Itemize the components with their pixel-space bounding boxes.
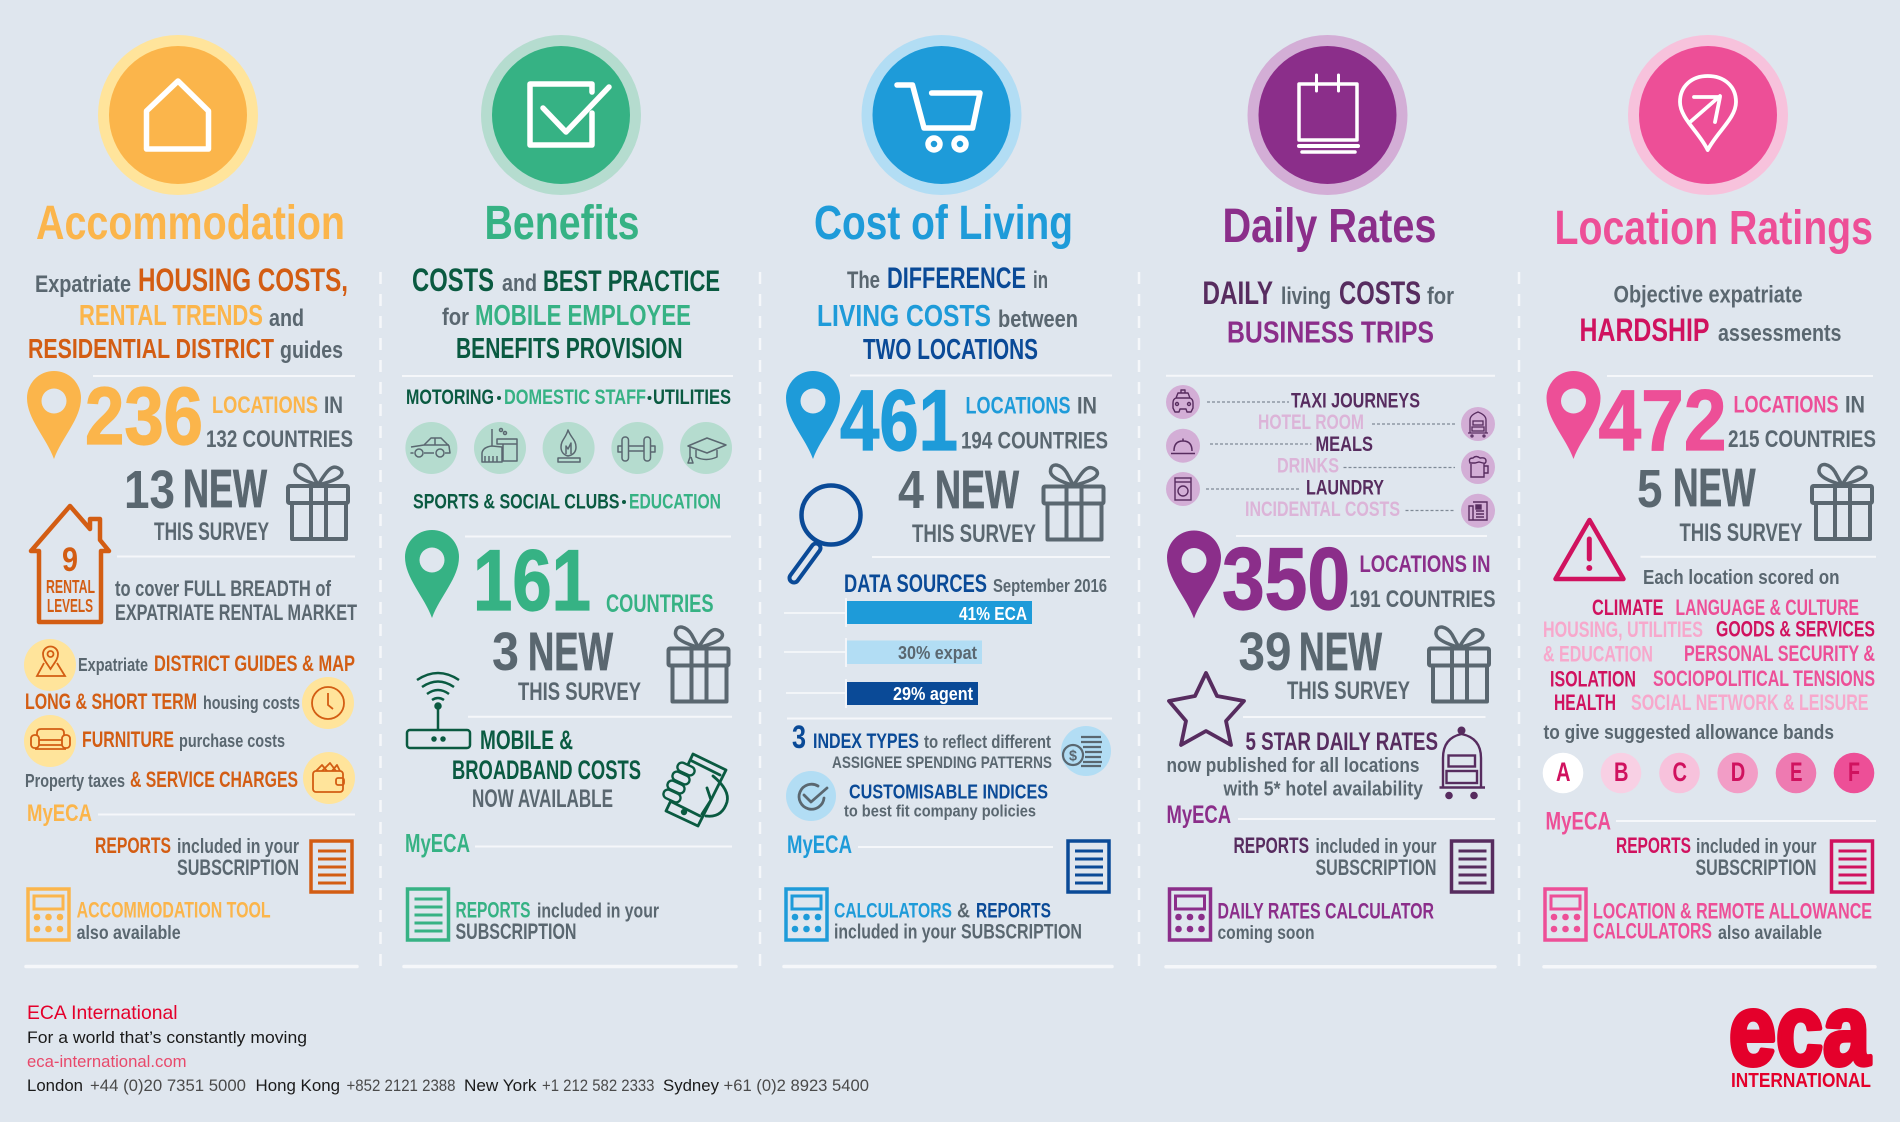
text block: scoring categories: HOUSING, UTILITIES — [1543, 617, 1703, 642]
bar: 41% ECA — [847, 601, 1032, 624]
text block: daily rates description: COSTS — [1339, 275, 1421, 311]
icon: wifi router — [407, 673, 470, 748]
panel: benefits — [402, 35, 736, 966]
icon: 9 rental levels house: LEVELS — [47, 596, 93, 616]
icon: report — [1832, 841, 1872, 892]
icon: district map — [24, 639, 76, 691]
bar: 29% agent — [847, 682, 978, 705]
text: mobile and broadband costs: MOBILE & — [480, 725, 573, 755]
bar chart: data sources — [784, 598, 1032, 708]
text block: cost of living description: in — [1033, 267, 1048, 294]
text block: scoring categories — [1543, 595, 1875, 715]
heading: data sources: DATA SOURCES — [844, 570, 987, 598]
icon: checkbox badge — [481, 35, 641, 195]
icon: gift — [668, 627, 728, 702]
icon: location pin — [1546, 371, 1600, 459]
text block: scoring categories: CLIMATE — [1592, 595, 1664, 620]
stat: 350 locations: 191 COUNTRIES — [1350, 586, 1496, 613]
icon: gift — [1812, 464, 1872, 539]
footer: contact details: For a world that’s constantly moving — [27, 1028, 307, 1047]
stat: 350 locations: LOCATIONS IN — [1360, 551, 1490, 578]
stat: 3 new this survey: NEW — [528, 622, 613, 682]
text block: benefits description: and — [502, 270, 537, 297]
text block: benefits description: BEST PRACTICE — [543, 265, 720, 298]
icon: notepad badge — [1248, 35, 1408, 195]
text: daily rates calculator: DAILY RATES CALCULATOR — [1218, 898, 1434, 924]
icon: customisable check — [786, 771, 836, 821]
text: calculators and reports: SUBSCRIPTION — [961, 920, 1082, 944]
icon: location pin — [786, 371, 840, 459]
chart: allowance bands A to F: A — [1556, 757, 1570, 787]
text: reports: REPORTS — [456, 898, 530, 922]
item: incidental costs: INCIDENTAL COSTS — [1245, 498, 1400, 521]
text: reports: included in your — [1696, 836, 1817, 858]
text block: location ratings description: assessments — [1718, 320, 1842, 347]
icon: dumbbell — [611, 422, 663, 474]
bar: 30% expat — [847, 640, 982, 664]
text: benefit categories top — [406, 386, 731, 409]
stat: 4 new this survey: THIS SURVEY — [912, 520, 1036, 548]
icon: calculator — [28, 889, 69, 940]
text: benefit categories top: MOTORING — [406, 386, 494, 409]
chart: allowance bands A to F: C — [1672, 757, 1687, 787]
stat: 472 locations: IN — [1845, 392, 1865, 418]
icon: location pin — [405, 530, 459, 618]
stat: 39 new this survey — [1238, 622, 1410, 705]
stat: 461 locations: 461 — [840, 373, 958, 469]
stat: 5 new this survey: THIS SURVEY — [1680, 519, 1803, 547]
icon: 9 rental levels house: 9 — [62, 541, 78, 579]
text: accommodation tool: also available — [77, 923, 181, 944]
icon: calculator — [1545, 889, 1586, 940]
item: laundry — [1166, 472, 1384, 506]
text block: accommodation description: guides — [280, 337, 343, 364]
icon: 9 rental levels house — [31, 506, 109, 622]
item: drinks: DRINKS — [1277, 454, 1339, 478]
icon: warning triangle — [1556, 520, 1624, 579]
icon: report — [311, 841, 352, 892]
icon: sofa — [24, 715, 76, 767]
stat: 236 locations: 132 COUNTRIES — [206, 426, 353, 453]
heading: MyECA: MyECA — [1166, 801, 1231, 829]
text: calculators and reports: CALCULATORS — [834, 900, 952, 922]
footer: contact details: +852 2121 2388 — [346, 1076, 456, 1095]
text: location allowance calculators — [1593, 898, 1872, 944]
text: reports — [456, 898, 659, 944]
text: furniture — [82, 727, 285, 752]
text: reports — [1234, 833, 1437, 880]
text: district guides: DISTRICT GUIDES & MAP — [154, 651, 355, 676]
text: 5 star daily rates: 5 STAR DAILY RATES — [1246, 728, 1438, 756]
icon: car — [405, 422, 457, 474]
text: long and short term: LONG & SHORT TERM — [25, 689, 197, 714]
text: furniture: FURNITURE — [82, 727, 174, 752]
text block: benefits description: BENEFITS PROVISION — [456, 333, 682, 365]
text: 5 star daily rates: with 5* hotel availability — [1223, 778, 1424, 800]
icon: house badge — [98, 35, 258, 195]
text: reports — [1616, 833, 1817, 880]
stat: 13 new this survey — [124, 459, 269, 546]
icon: clock — [302, 677, 354, 729]
text block: accommodation description — [28, 262, 348, 364]
stat: 3 new this survey: 3 — [492, 622, 519, 682]
chart: allowance bands A to F: B — [1614, 757, 1628, 787]
stat: 4 new this survey: NEW — [935, 460, 1019, 520]
footer: contact details: Hong Kong — [256, 1076, 340, 1095]
stat: 5 new this survey: 5 — [1637, 459, 1662, 519]
text block: cost of living description: DIFFERENCE — [887, 262, 1026, 295]
logo: ECA International: INTERNATIONAL — [1731, 1070, 1871, 1092]
item: incidental costs — [1245, 494, 1495, 528]
heading: data sources: September 2016 — [993, 576, 1107, 596]
text: benefit categories top: DOMESTIC STAFF — [504, 386, 646, 409]
icon: location pin — [27, 371, 81, 459]
text block: daily rates description: BUSINESS TRIPS — [1227, 314, 1434, 350]
heading: accommodation: Accommodation — [36, 197, 345, 250]
footer: contact details: New York — [464, 1076, 537, 1095]
icon: cleaning — [474, 422, 526, 474]
text: index types: ASSIGNEE SPENDING PATTERNS — [832, 753, 1052, 772]
text: location allowance calculators: also available — [1718, 923, 1822, 944]
footer: contact details: +1 212 582 2333 — [542, 1076, 654, 1095]
heading: MyECA: MyECA — [787, 831, 852, 859]
chart: allowance bands A to F: D — [1731, 757, 1745, 787]
text: index types: INDEX TYPES — [813, 730, 919, 753]
bar: 41% ECA: 41% ECA — [959, 604, 1027, 624]
text: reports: SUBSCRIPTION — [1316, 855, 1436, 880]
panel: location ratings — [1543, 35, 1876, 967]
icon: graduation cap — [680, 422, 732, 474]
heading: daily rates: Daily Rates — [1222, 200, 1436, 253]
text: index types: 3 — [792, 719, 806, 755]
item: hotel room — [1258, 407, 1495, 441]
heading: cost of living: Cost of Living — [814, 197, 1073, 250]
text: benefit categories bottom: SPORTS & SOCIAL CLUBS — [413, 490, 620, 514]
text block: cost of living description — [817, 262, 1078, 366]
stat: 350 locations — [1222, 529, 1496, 628]
icon: location pin — [1167, 530, 1221, 618]
text: mobile and broadband costs: NOW AVAILABLE — [472, 785, 613, 813]
heading: MyECA: MyECA — [405, 828, 470, 858]
text block: scoring categories: & EDUCATION — [1543, 642, 1653, 666]
text block: cost of living description: The — [847, 267, 880, 294]
text block: location ratings description: Objective expatriate — [1614, 282, 1802, 308]
stat: 161 countries — [473, 533, 714, 629]
text: customisable indices — [844, 782, 1048, 820]
stat: 161 countries: 161 — [473, 533, 591, 629]
text: allowance bands intro: to give suggested allowance bands — [1544, 722, 1834, 744]
stat: 472 locations: 472 — [1598, 373, 1726, 469]
text block: accommodation description: and — [269, 305, 304, 332]
text: reports: SUBSCRIPTION — [177, 855, 299, 880]
footer: contact details: ECA International — [27, 1002, 178, 1024]
text block: benefits description: for — [442, 304, 469, 331]
stat: 461 locations: 194 COUNTRIES — [961, 428, 1108, 454]
text block: daily rates description: DAILY — [1202, 275, 1273, 311]
stat: 3 new this survey — [492, 622, 641, 706]
text: 5 star daily rates: now published for all locations — [1166, 755, 1420, 777]
text: reports — [95, 833, 299, 880]
text block: scoring categories: HEALTH — [1554, 690, 1616, 715]
icon: luggage trolley — [1440, 728, 1485, 798]
text: reports: REPORTS — [1234, 833, 1309, 858]
panel: accommodation — [24, 35, 357, 966]
text block: accommodation description: HOUSING COSTS, — [138, 262, 348, 298]
icon: report — [408, 889, 448, 940]
icon: 9 rental levels house: RENTAL — [46, 577, 95, 597]
icon: gas flame — [543, 422, 595, 474]
icon: report — [1068, 841, 1109, 892]
item: meals — [1166, 429, 1373, 463]
icon: calculator — [1170, 889, 1210, 940]
chart: allowance bands A to F — [1543, 753, 1874, 793]
text: calculators and reports: & — [957, 900, 970, 922]
text block: location ratings description — [1580, 282, 1842, 348]
text: reports: included in your — [1316, 836, 1437, 858]
text block: location ratings description: HARDSHIP — [1580, 312, 1710, 348]
icon: gift — [288, 464, 348, 539]
heading: MyECA: MyECA — [27, 800, 92, 827]
text: customisable indices: CUSTOMISABLE INDICES — [849, 782, 1048, 804]
heading: benefits: Benefits — [484, 197, 640, 250]
bar: 30% expat: 30% expat — [898, 643, 977, 663]
stat: 350 locations: 350 — [1222, 529, 1350, 628]
text: reports: REPORTS — [95, 833, 171, 858]
text: accommodation tool: ACCOMMODATION TOOL — [77, 898, 271, 922]
text block: accommodation description: RENTAL TRENDS — [79, 300, 263, 332]
text: customisable indices: to best fit company policies — [844, 802, 1036, 820]
text: district guides: Expatriate — [78, 655, 148, 675]
icon: gift — [1429, 627, 1489, 702]
icon: calculator — [786, 889, 827, 940]
stat: 5 new this survey: NEW — [1673, 458, 1756, 518]
icon: gift — [1044, 465, 1104, 540]
stat: 461 locations: IN — [1077, 392, 1097, 420]
text block: full breadth: EXPATRIATE RENTAL MARKET — [115, 600, 357, 625]
stat: 161 countries: COUNTRIES — [606, 590, 714, 618]
text: 5 star daily rates — [1166, 728, 1438, 800]
text: reports: SUBSCRIPTION — [456, 919, 576, 944]
text: calculators and reports: included in your — [834, 922, 956, 944]
footer: contact details: +61 (0)2 8923 5400 — [724, 1076, 869, 1095]
chart: allowance bands A to F: E — [1790, 757, 1802, 787]
text block: scoring categories: ISOLATION — [1550, 666, 1636, 692]
text: service charges: Property taxes — [25, 771, 125, 791]
text: scoring intro: Each location scored on — [1643, 567, 1840, 589]
text: reports: included in your — [537, 900, 659, 922]
stat: 13 new this survey: NEW — [183, 459, 267, 519]
icon: star — [1169, 673, 1244, 745]
footer: contact details: eca-international.com — [27, 1052, 186, 1071]
stat: 236 locations: 236 — [85, 371, 203, 462]
text block: benefits description: MOBILE EMPLOYEE — [475, 300, 691, 332]
stat: 13 new this survey: THIS SURVEY — [154, 518, 269, 546]
text: location allowance calculators: CALCULATORS — [1593, 918, 1712, 944]
text: daily rates calculator — [1218, 898, 1434, 944]
text: reports: REPORTS — [1616, 833, 1691, 858]
text block: benefits description: COSTS — [412, 262, 494, 298]
text block: benefits description — [412, 262, 720, 365]
text: long and short term: housing costs — [203, 693, 300, 713]
stat: 472 locations — [1598, 373, 1876, 469]
text: calculators and reports: REPORTS — [976, 900, 1051, 922]
text: index types — [792, 719, 1052, 772]
logo: ECA International: eca — [1729, 974, 1871, 1086]
text block: accommodation description: Expatriate — [35, 271, 131, 298]
stat: 4 new this survey: 4 — [898, 460, 924, 520]
text: index types: to reflect different — [924, 732, 1051, 752]
text: calculators and reports — [834, 900, 1082, 944]
icon: coins: $ — [1069, 748, 1078, 764]
stat: 13 new this survey: 13 — [124, 460, 175, 520]
text: benefit categories top: UTILITIES — [653, 386, 731, 409]
heading: MyECA: MyECA — [1546, 808, 1611, 836]
footer: contact details: London — [27, 1076, 83, 1095]
icon: location arrow badge — [1628, 35, 1788, 195]
item: meals: MEALS — [1316, 433, 1373, 456]
stat: 461 locations — [840, 373, 1108, 469]
icon: coins — [1061, 726, 1111, 776]
icon: report — [1452, 841, 1492, 892]
stat: 5 new this survey — [1637, 458, 1803, 547]
text block: daily rates description: living — [1281, 283, 1331, 310]
stat: 461 locations: LOCATIONS — [966, 392, 1070, 420]
text block: cost of living description: TWO LOCATIONS — [863, 334, 1038, 366]
footer: contact details: +44 (0)20 7351 5000 — [90, 1076, 246, 1095]
stat: 236 locations: IN — [324, 392, 343, 419]
text block: full breadth — [115, 576, 357, 625]
text block: full breadth: to cover FULL BREADTH of — [115, 576, 332, 601]
text: mobile and broadband costs: BROADBAND COSTS — [452, 755, 641, 785]
chart: allowance bands A to F: F — [1848, 757, 1860, 787]
text: mobile and broadband costs — [452, 725, 641, 813]
text: daily rates calculator: coming soon — [1218, 923, 1314, 944]
text: service charges — [25, 767, 298, 792]
list: daily cost items — [1166, 385, 1495, 528]
item: taxi journeys — [1166, 385, 1420, 419]
stat: 236 locations: LOCATIONS — [212, 392, 318, 419]
icon: magnifying glass — [794, 486, 860, 578]
stat: 39 new this survey: THIS SURVEY — [1287, 677, 1410, 705]
text: accommodation tool — [77, 898, 271, 944]
stat: 472 locations: LOCATIONS — [1734, 392, 1838, 418]
text block: daily rates description: for — [1427, 283, 1454, 310]
text: reports: SUBSCRIPTION — [1696, 855, 1816, 880]
item: hotel room: HOTEL ROOM — [1258, 411, 1364, 434]
stat: 39 new this survey: 39 — [1238, 622, 1292, 682]
panel: cost of living — [784, 35, 1112, 966]
text: service charges: & SERVICE CHARGES — [130, 767, 298, 792]
icon: hand holding phone — [662, 754, 727, 826]
text block: accommodation description: RESIDENTIAL DISTRICT — [28, 333, 274, 364]
text block: daily rates description — [1202, 275, 1454, 350]
text: benefit categories bottom: EDUCATION — [629, 490, 721, 514]
text block: cost of living description: LIVING COSTS — [817, 298, 991, 333]
text block: cost of living description: between — [998, 306, 1078, 333]
item: laundry: LAUNDRY — [1306, 476, 1384, 500]
text: district guides — [78, 651, 355, 676]
text: furniture: purchase costs — [179, 731, 285, 751]
icon: shopping cart badge — [862, 35, 1022, 195]
footer: contact details — [27, 1002, 869, 1095]
panel: daily rates — [1166, 35, 1496, 967]
item: taxi journeys: TAXI JOURNEYS — [1291, 390, 1420, 412]
bar: 29% agent: 29% agent — [893, 684, 973, 704]
stat: 3 new this survey: THIS SURVEY — [518, 678, 641, 706]
icon: wallet — [303, 752, 355, 804]
item: drinks — [1277, 450, 1495, 484]
footer: contact details: Sydney — [663, 1076, 719, 1095]
text: reports: included in your — [177, 836, 299, 858]
stat: 39 new this survey: NEW — [1299, 622, 1382, 682]
stat: 236 locations — [85, 371, 353, 462]
stat: 4 new this survey — [898, 460, 1036, 548]
